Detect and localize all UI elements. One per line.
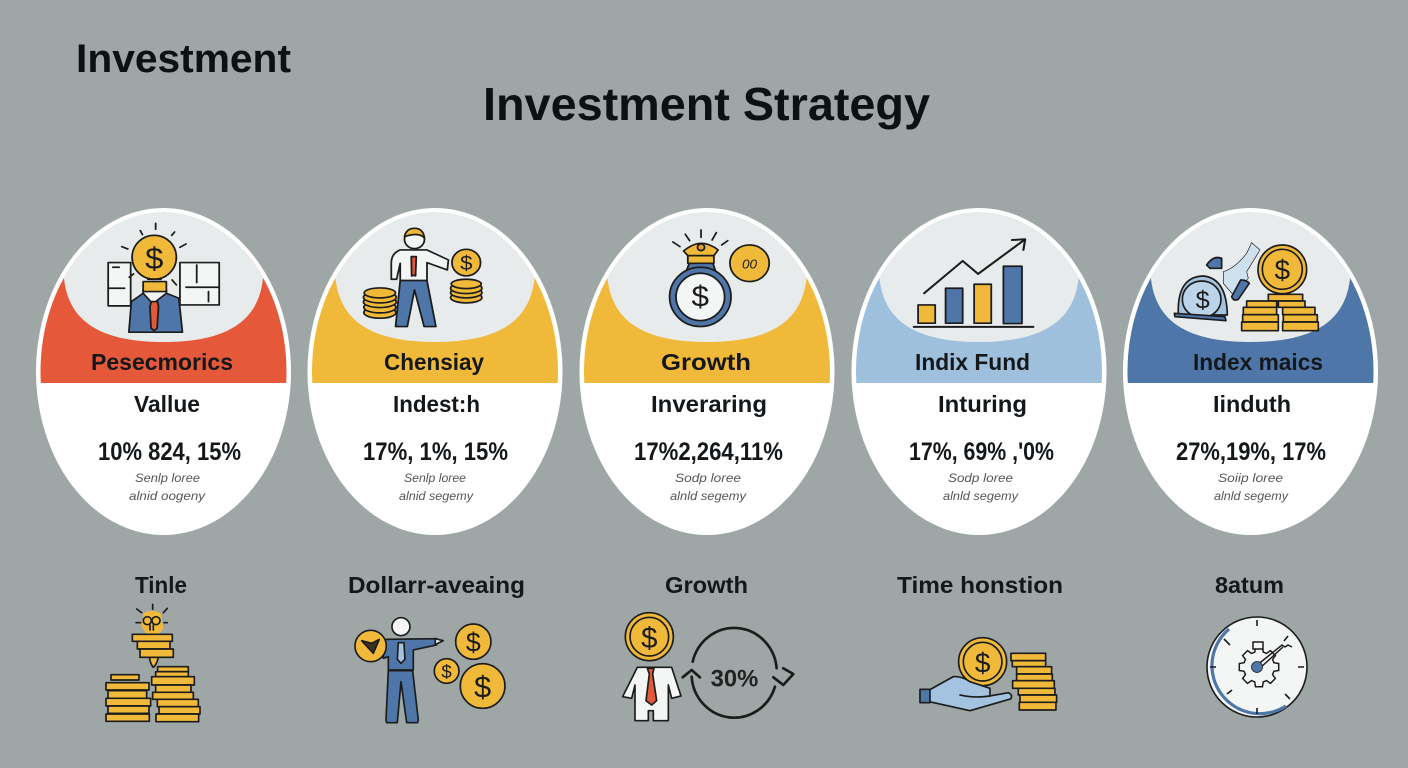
icon: money bag, coin and gold stacks (1174, 243, 1318, 331)
icon: hand holding coin with stack (920, 638, 1057, 711)
icon: clock with gear (1207, 617, 1307, 717)
caption line 2: alnid oogeny (129, 489, 206, 503)
icon: money bag and coin (670, 230, 769, 327)
caption line 2: alnid segemy (399, 489, 474, 503)
heading: small title: Investment (76, 37, 291, 81)
caption line 2: alnld segemy (943, 489, 1019, 503)
caption line 2: alnld segemy (670, 489, 747, 503)
strategy name: Inturing (938, 391, 1027, 417)
icon: investor with coins (363, 228, 482, 327)
band title: Index maics (1193, 349, 1323, 375)
panel: card 2 (305, 200, 565, 535)
icon: money bag, coin and gold stacks: $ (1275, 254, 1291, 285)
caption line 1: Senlp loree (135, 471, 200, 485)
percentages: 27%,19%, 17% (1176, 438, 1326, 466)
panel: card 4 (849, 200, 1109, 535)
icon: hand holding coin with stack: $ (975, 648, 991, 679)
icon: investor pointing at coins: $ (474, 670, 491, 704)
icon: gold stacks with lightbulb (106, 604, 200, 722)
icon: money bag and coin: $ (692, 281, 709, 313)
icon: investor with coins: $ (460, 252, 473, 275)
caption line 1: Sodp loree (675, 471, 741, 485)
caption line 1: Senlp loree (404, 471, 466, 485)
band title: Growth (661, 349, 751, 375)
caption line 1: Sodp loree (948, 471, 1013, 485)
caption line 2: alnld segemy (1214, 489, 1289, 503)
icon: investor pointing at coins (355, 618, 505, 723)
icon: lightbulb head investor (108, 223, 219, 332)
icon: money bag, coin and gold stacks: $ (1196, 286, 1210, 314)
strategy name: Inveraring (651, 391, 767, 417)
bottom label: Dollarr-aveaing: Dollarr-aveaing (348, 572, 525, 598)
strategy name: Indest:h (393, 391, 480, 417)
percentages: 17%, 1%, 15% (363, 438, 508, 466)
bottom label: Time honstion: Time honstion (897, 572, 1063, 598)
icon: 30% cycle arrows: 30% (711, 666, 758, 693)
panel: card 1 (34, 200, 294, 535)
icon: lightbulb head investor: $ (145, 241, 164, 276)
percentages: 17%2,264,11% (634, 438, 783, 466)
band title: Chensiay (384, 349, 484, 375)
icon: money bag and coin: 00 (742, 257, 758, 271)
percentages: 10% 824, 15% (98, 438, 241, 466)
bottom label: Growth: Growth (665, 572, 748, 598)
icon: 30% cycle arrows (683, 628, 793, 718)
strategy name: Iinduth (1213, 391, 1291, 417)
band title: Pesecmorics (91, 349, 233, 375)
caption line 1: Soiip loree (1218, 471, 1283, 485)
icon: investor pointing at coins: $ (441, 661, 452, 682)
icon: rising bar chart (914, 239, 1033, 327)
bottom label: 8atum: 8atum (1215, 572, 1284, 598)
icon: coin-head investor (623, 613, 681, 721)
heading: main title: Investment Strategy (483, 78, 930, 130)
strategy name: Vallue (134, 391, 200, 417)
icon: coin-head investor: $ (641, 622, 657, 655)
band title: Indix Fund (915, 349, 1030, 375)
bottom label: Tinle: Tinle (135, 572, 187, 598)
panel: card 3 (577, 200, 837, 535)
percentages: 17%, 69% ,'0% (909, 438, 1054, 466)
icon: investor pointing at coins: $ (466, 627, 481, 657)
panel: card 5 (1120, 200, 1380, 535)
